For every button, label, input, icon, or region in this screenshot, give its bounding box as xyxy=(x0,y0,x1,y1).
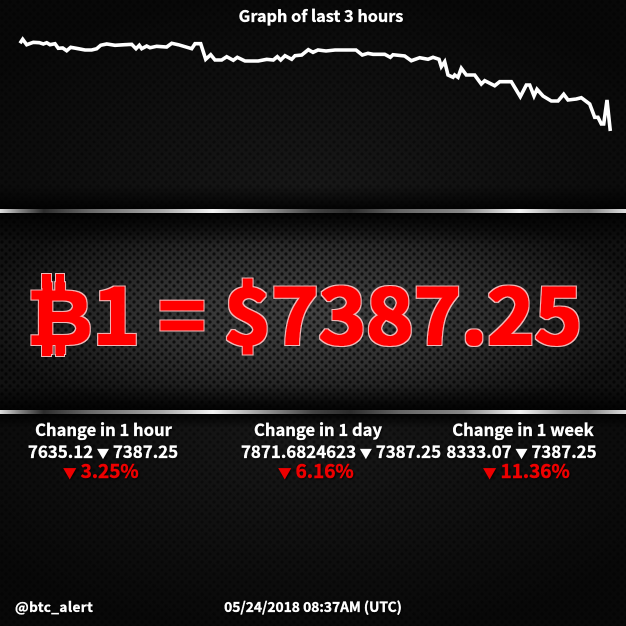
graph title: Graph of last 3 hours xyxy=(239,3,403,27)
stat: change in 1 day xyxy=(241,417,441,484)
stat label: Change in 1 hour xyxy=(35,417,172,441)
headline price: ₿1 = $7387.25 xyxy=(27,256,582,366)
divider: lower metallic line xyxy=(0,410,626,414)
stat label: Change in 1 day xyxy=(254,417,382,441)
stat: change in 1 hour xyxy=(28,417,178,484)
footer timestamp: 05/24/2018 08:37AM (UTC) xyxy=(224,596,402,616)
stat label: Change in 1 week xyxy=(452,417,594,441)
stat percent: ▼ 3.25% xyxy=(63,457,139,484)
divider: upper metallic line xyxy=(0,209,626,213)
stat values: 7635.12 ▼ 7387.25 xyxy=(28,438,178,463)
stat values: 7871.6824623 ▼ 7387.25 xyxy=(241,438,441,463)
line chart: last 3 hours xyxy=(18,36,612,132)
stat values: 8333.07 ▼ 7387.25 xyxy=(446,438,597,463)
stat percent: ▼ 6.16% xyxy=(278,457,354,484)
stat percent: ▼ 11.36% xyxy=(483,457,570,484)
stat: change in 1 week xyxy=(446,417,597,484)
footer handle: @btc_alert xyxy=(15,596,93,616)
